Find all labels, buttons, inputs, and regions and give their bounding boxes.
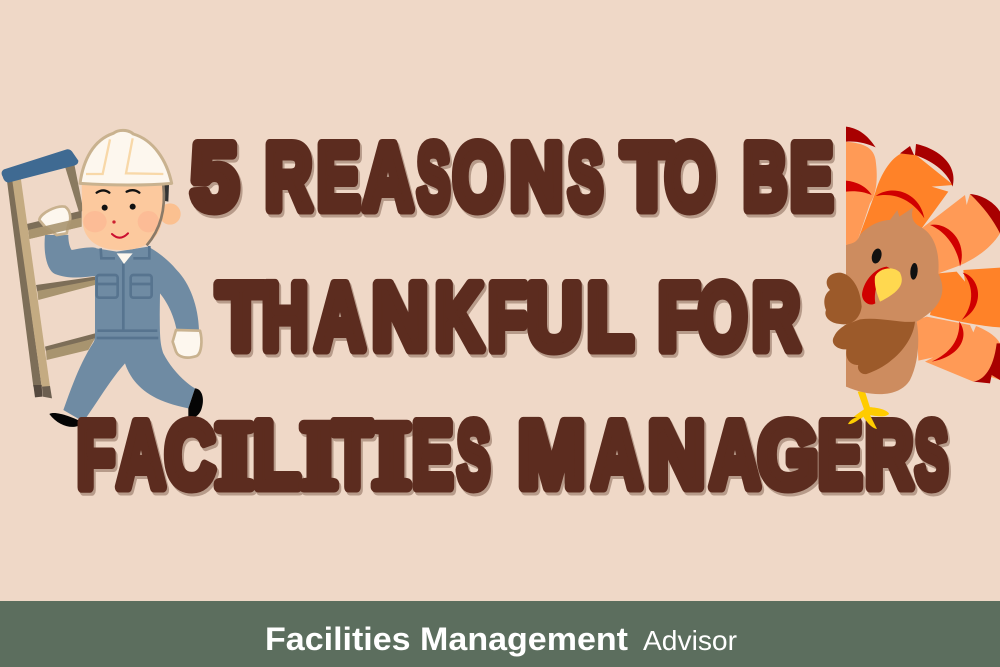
face [82,183,163,250]
title line 3: L [253,402,300,507]
icon: turkey peeking [824,127,1000,429]
title line 1 [191,124,833,229]
hand on ladder [28,206,82,239]
title line 3: F [77,402,115,507]
title line 1: O [453,124,503,229]
helmet strap [147,185,164,245]
title line 2: O [698,264,747,369]
turkey foot overlapping title [848,407,889,429]
title line 2: T [217,264,265,369]
title line 3: I [373,404,410,508]
title line 3: I [301,404,337,508]
shoes [49,388,203,427]
title line 1: S [568,124,603,229]
title line 3: E [412,402,453,507]
title line 3: R [865,402,913,507]
title line 3: A [710,402,760,507]
title line 1: E [317,124,360,229]
glove [173,330,201,358]
ladder [2,149,95,398]
collar [117,253,133,264]
facial features [97,190,139,238]
title line 2: N [372,264,428,369]
title line 3: A [117,402,165,507]
eyes [870,247,918,280]
work suit [45,235,199,422]
footer bar [0,601,1000,667]
title line 3: S [457,402,490,507]
title line 3: T [333,402,372,507]
ear [159,203,181,225]
wings [824,273,915,374]
beak [875,268,902,302]
title line 2: F [488,264,527,369]
title line 1: T [622,124,672,229]
blush [83,211,159,232]
footer brand name: Facilities Management [265,621,628,657]
title line 2: R [752,264,800,369]
title line 3: S [915,402,948,507]
title line 2: L [587,264,633,369]
title line 3: G [758,402,818,507]
title line 1: B [743,124,787,229]
title line 1: S [417,124,450,229]
title [77,124,948,508]
title line 2: A [315,264,365,369]
title line 3 [77,402,948,508]
suit seams [97,246,158,338]
title line 2: U [527,264,582,369]
title line 3: M [518,402,585,507]
leg [848,392,889,429]
title line 2 [217,264,800,369]
title line 2: K [435,264,483,369]
wattle [862,267,890,305]
title line 3: I [216,404,253,508]
title line 1: 5 [191,124,238,229]
title line 2: H [262,264,308,369]
title line 3: A [592,402,642,507]
title line 3: N [648,402,705,507]
title line 1: E [790,124,833,229]
footer brand suffix: Advisor [643,625,737,656]
tail feathers [846,127,1000,383]
title line 1: N [510,124,563,229]
title line 3: C [165,402,215,507]
body [846,207,942,394]
title line 1: A [363,124,413,229]
title line 1: O [665,124,715,229]
hard hat [80,130,172,185]
title line 3: E [818,402,862,507]
title line 2: F [658,264,700,369]
title line 1: R [265,124,312,229]
icon: worker carrying a ladder [2,130,203,427]
hair [150,185,169,202]
